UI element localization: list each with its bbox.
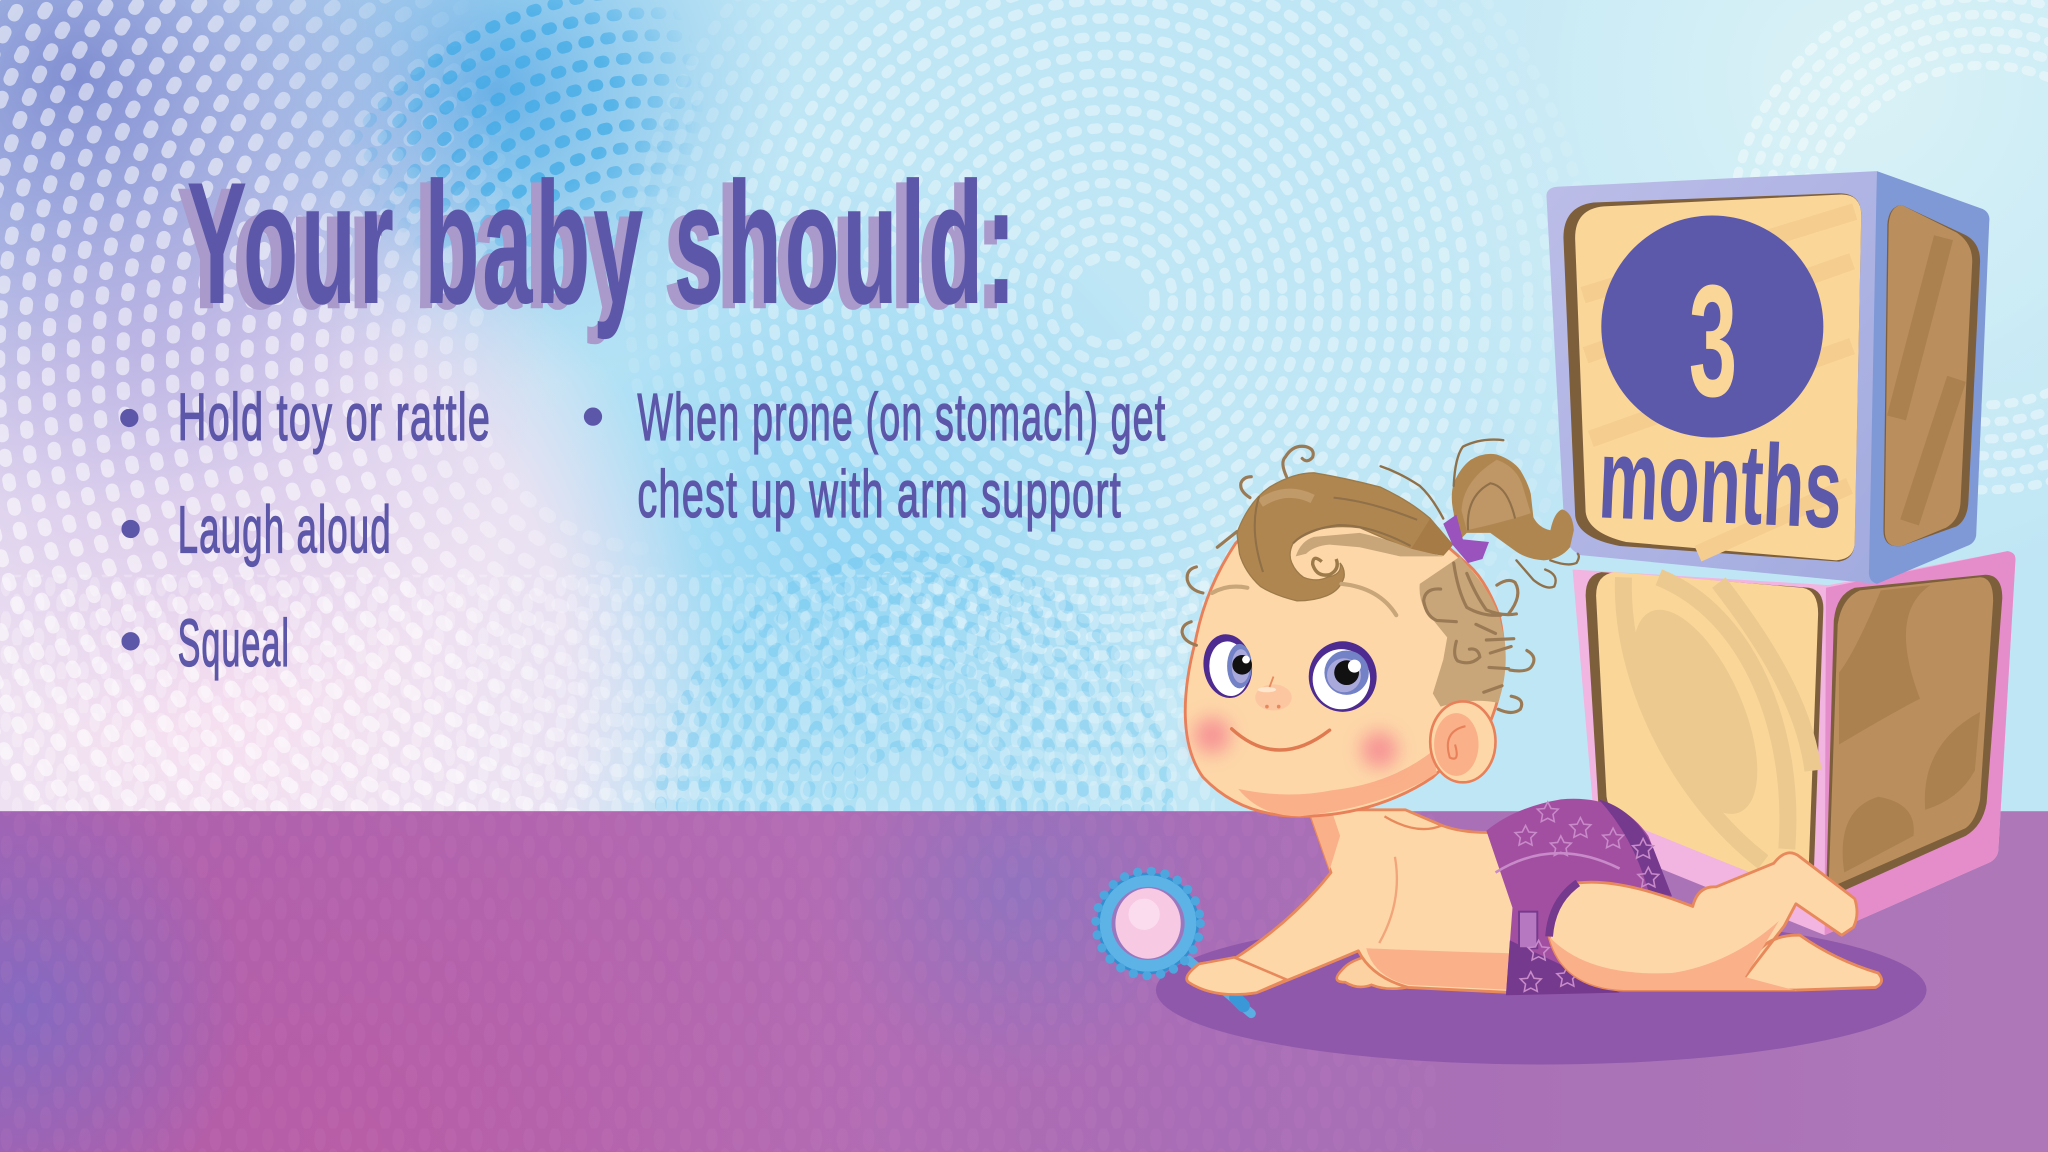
hand over rattle handle xyxy=(1187,957,1287,994)
title: Your baby should: xyxy=(176,151,1008,345)
ponytail xyxy=(1381,440,1579,588)
torso and arm xyxy=(1187,810,1515,994)
background: dotted watercolor wall xyxy=(0,0,2048,812)
right eye xyxy=(1309,641,1377,712)
diaper xyxy=(1486,799,1672,995)
wood panel front xyxy=(1563,193,1861,562)
back hair xyxy=(1420,556,1506,707)
rattle xyxy=(1096,871,1251,1014)
curls xyxy=(1182,446,1534,712)
bullet list: left column xyxy=(121,381,491,681)
nose xyxy=(1255,677,1292,711)
left eye xyxy=(1199,631,1256,701)
baby xyxy=(1096,440,1882,1014)
top blue block with 3 months label xyxy=(1546,171,1989,584)
bullet list: left column: Hold toy or rattle xyxy=(178,381,491,455)
far hand xyxy=(1337,953,1417,989)
bullet list: right column: When prone (on stomach) get xyxy=(637,381,1166,455)
cheeks xyxy=(1194,717,1398,768)
bottom pink block xyxy=(1573,551,2016,935)
wood panel side xyxy=(1883,205,1980,546)
rug xyxy=(1156,916,1927,1064)
leg and foot xyxy=(1549,853,1882,990)
title xyxy=(176,146,1019,345)
ear xyxy=(1430,701,1496,782)
eyebrows xyxy=(1212,584,1396,615)
front hair swoosh xyxy=(1237,473,1452,601)
bullet list: right column xyxy=(584,381,1166,532)
floor xyxy=(0,811,2048,1152)
bullet list: left column: Squeal xyxy=(178,607,290,681)
number 3: 3 xyxy=(1689,252,1737,430)
bullet list: right column: chest up with arm support xyxy=(637,458,1122,532)
number circle xyxy=(1601,216,1823,438)
hair bow xyxy=(1443,515,1489,563)
title: Your baby should: xyxy=(187,146,1019,340)
months label: months xyxy=(1596,414,1845,553)
smile xyxy=(1232,729,1330,750)
head xyxy=(1185,505,1504,816)
bullet list: left column: Laugh aloud xyxy=(178,493,392,567)
